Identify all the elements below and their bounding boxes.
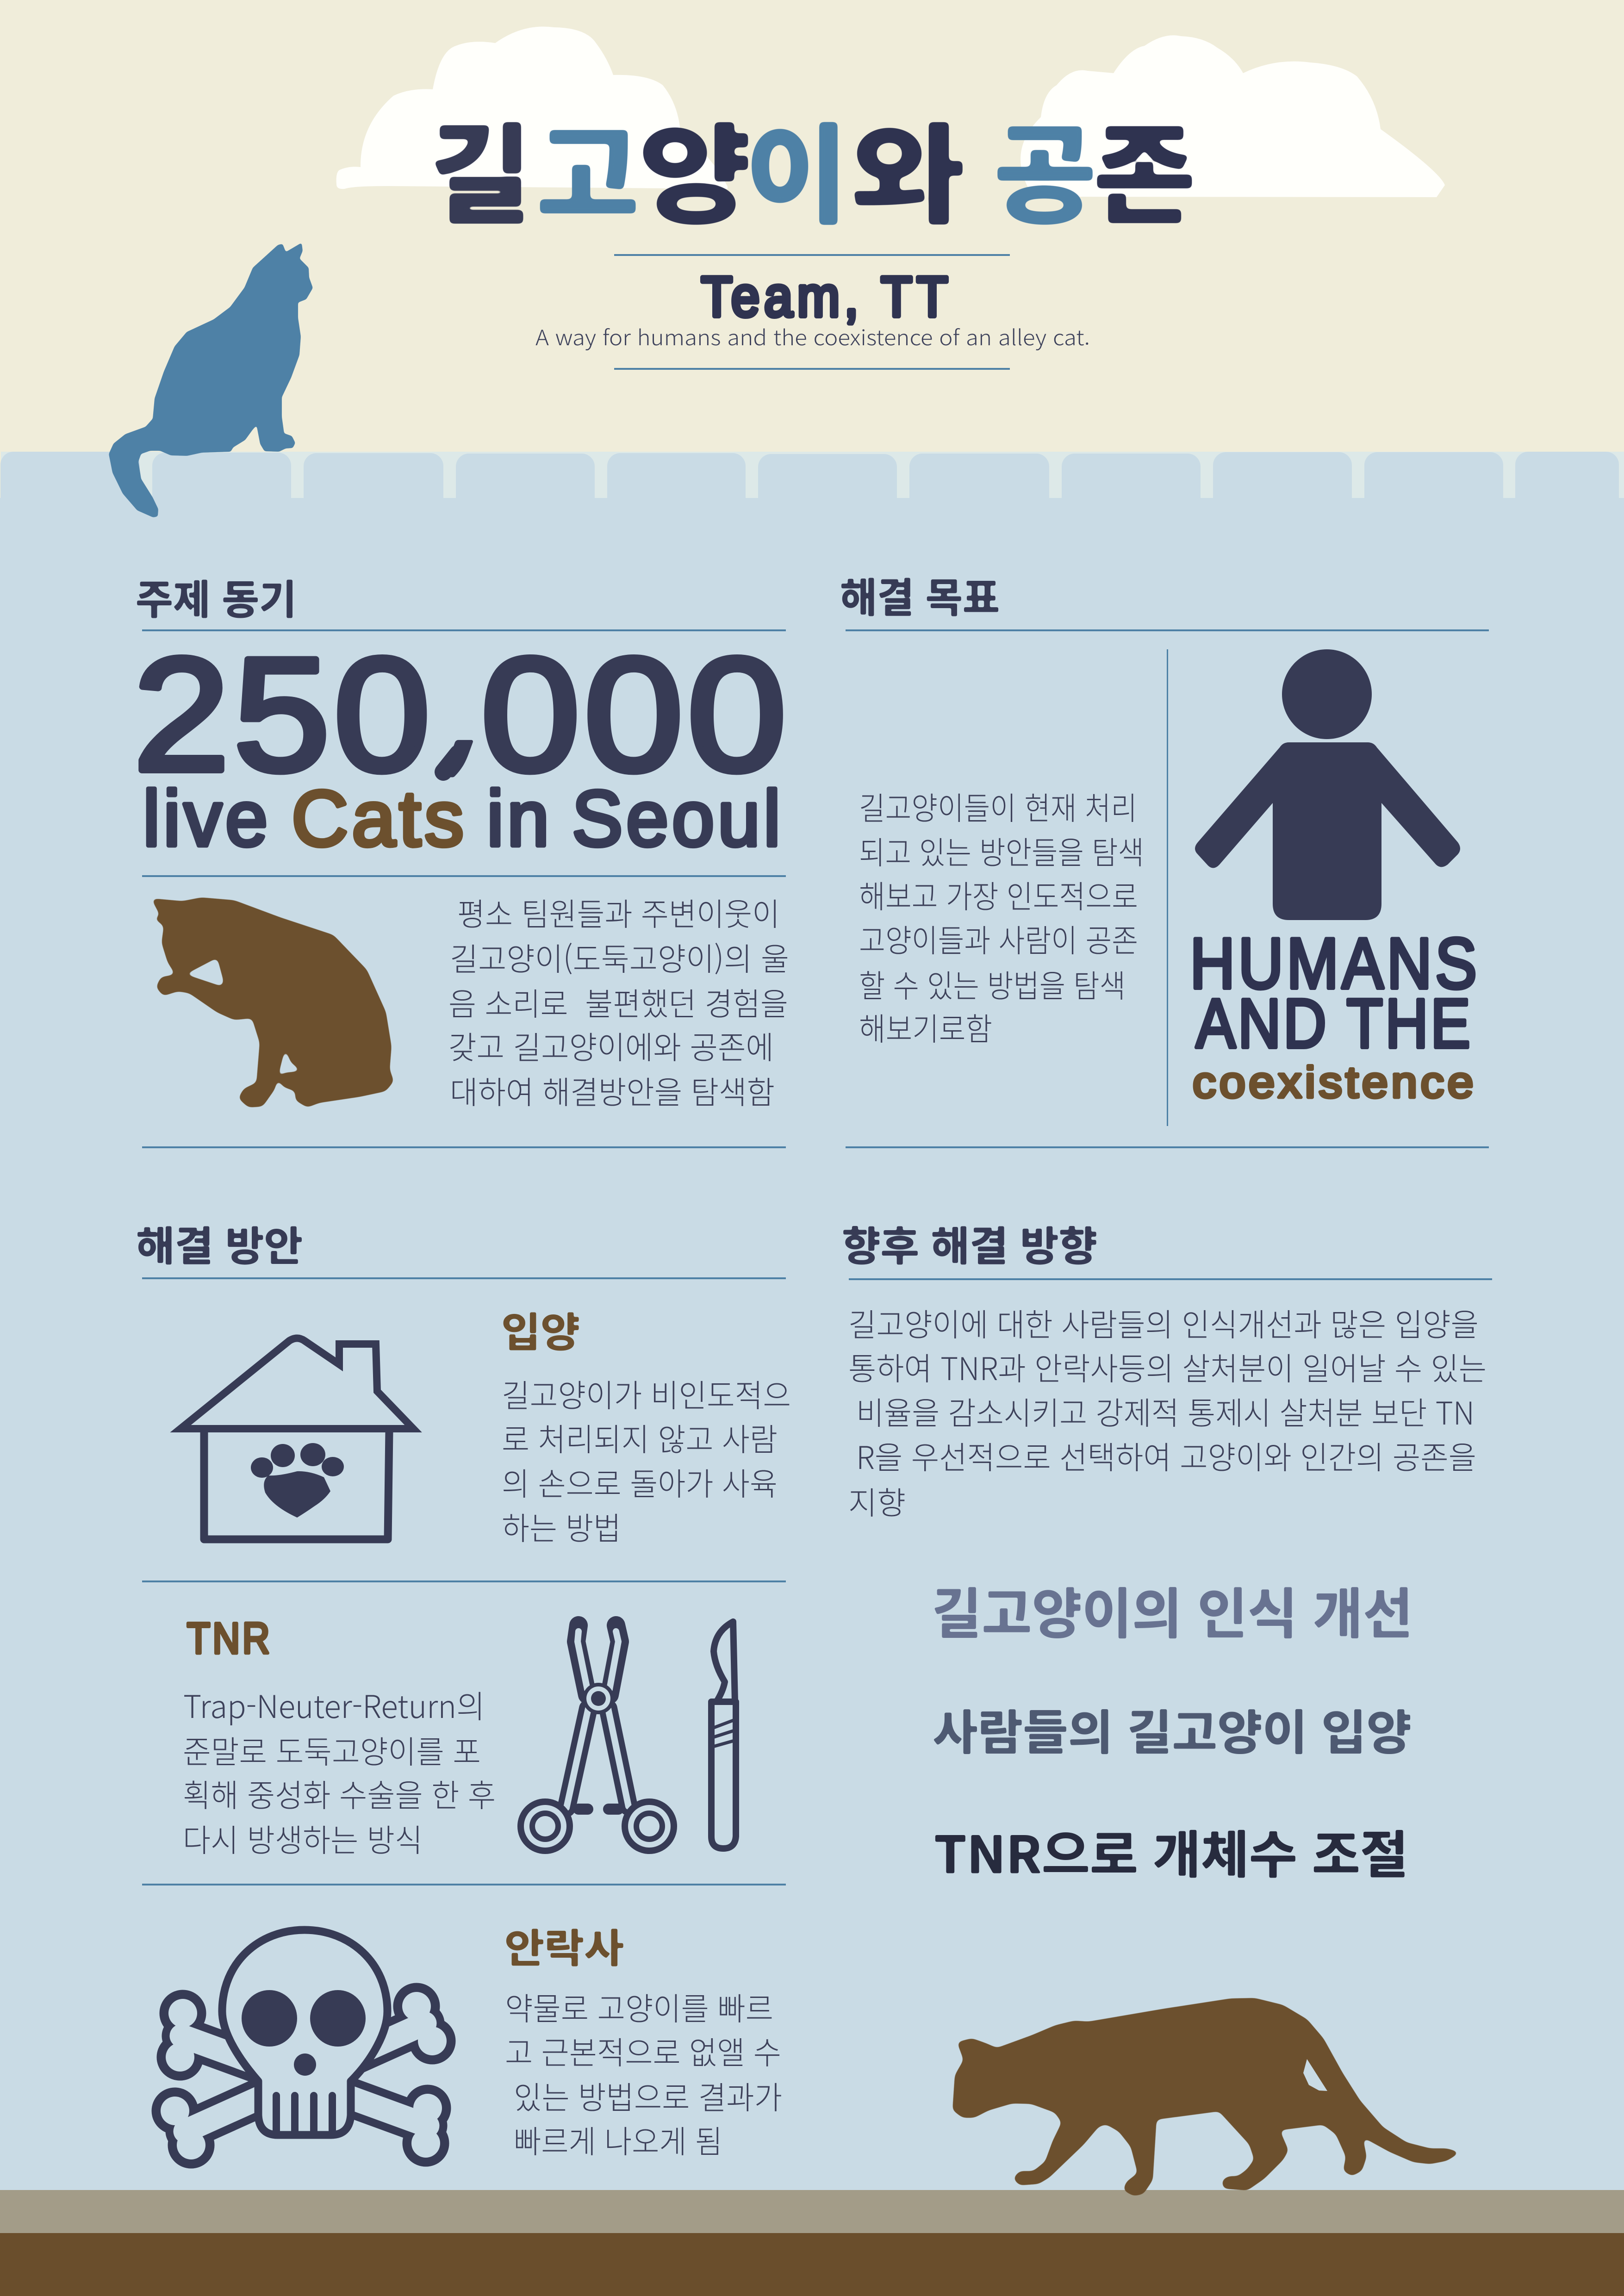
icon: house with paw (180, 1338, 413, 1539)
panel: 주제 동기 (133, 567, 790, 1148)
text: euthanasia (505, 1984, 782, 2162)
subheading: TNR: TNR (187, 1614, 272, 1662)
text: TNR description (183, 1681, 496, 1861)
text: motivation: 음 소리로 불편했던 경험을 (448, 979, 788, 1025)
subtitle: A way for humans and the coexistence of an alley cat. (535, 321, 1090, 352)
slogan: humans and the coexistence: HUMANS (1190, 923, 1480, 1003)
heading: 향후 해결 방향: 향후 해결 방향 (842, 1214, 1097, 1273)
text: adoption: 로 처리되지 않고 사람 (502, 1414, 778, 1460)
text: goal: 해보기로함 (859, 1004, 992, 1050)
icon: forceps (517, 1625, 677, 1854)
text: future direction: 길고양이에 대한 사람들의 인식개선과 많은 입양을 (848, 1300, 1479, 1345)
slogan: humans and the coexistence: AND THE (1196, 984, 1473, 1062)
big number: 000 (481, 624, 790, 804)
title: 길 (429, 87, 532, 246)
text: TNR description: 획해 중성화 수술을 한 후 (183, 1770, 496, 1816)
cloud right (1020, 35, 1445, 197)
team name: Team, TT (701, 265, 952, 328)
slogan: 사람들의 길고양이 입양: 사람들의 길고양이 입양 (933, 1694, 1412, 1763)
panel: 해결 목표 (840, 566, 1489, 1148)
text: adoption: 하는 방법 (502, 1503, 621, 1549)
panel: 해결 방안 (136, 1214, 791, 2168)
caption: live Cats in Seoul: live (143, 775, 271, 863)
panel: 향후 해결 방향 (842, 1214, 1492, 1888)
text: adoption: 길고양이가 비인도적으 (502, 1370, 791, 1416)
text: euthanasia: 빠르게 나오게 됨 (514, 2116, 722, 2162)
big number: 250 (133, 624, 434, 804)
cloud left (336, 26, 728, 189)
text: future direction: 비율을 감소시키고 강제적 통제시 살처분 보단 TN (856, 1388, 1475, 1434)
text: future direction: 통하여 TNR과 안락사등의 살처분이 일어날 수 있는 (848, 1344, 1487, 1389)
text: motivation (448, 889, 789, 1113)
text: goal: 할 수 있는 방법을 탐색 (859, 961, 1126, 1007)
sky background (0, 0, 1624, 463)
icon: brown walking cat (953, 1998, 1459, 2196)
text: adoption: 의 손으로 돌아가 사육 (502, 1459, 778, 1505)
text: motivation: 대하여 해결방안을 탐색함 (450, 1067, 775, 1113)
title: 존 (1093, 87, 1196, 246)
caption: live Cats in Seoul: Cats (292, 775, 467, 863)
title: 와 (851, 87, 965, 246)
text: motivation: 갖고 길고양이에와 공존에 (448, 1022, 774, 1068)
caption: live Cats in Seoul: Seoul (572, 775, 784, 863)
slogan: 길고양이의 인식 개선: 길고양이의 인식 개선 (932, 1570, 1413, 1649)
title: 고 (536, 87, 640, 246)
text: goal (859, 783, 1144, 1050)
title (429, 87, 1196, 246)
text: TNR description: 다시 방생하는 방식 (183, 1815, 423, 1861)
text: euthanasia: 고 근본적으로 없앨 수 (505, 2028, 781, 2073)
heading: 해결 목표: 해결 목표 (840, 566, 1000, 624)
title: 이 (745, 87, 849, 246)
text: goal: 고양이들과 사람이 공존 (859, 915, 1138, 961)
text: euthanasia: 약물로 고양이를 빠르 (505, 1984, 773, 2029)
slogan: humans and the coexistence (1190, 923, 1480, 1107)
title: 공 (993, 87, 1097, 246)
fence (0, 452, 1624, 2192)
text: motivation: 평소 팀원들과 주변이웃이 (457, 889, 780, 935)
heading: 주제 동기: 주제 동기 (136, 567, 297, 626)
heading: 해결 방안: 해결 방안 (136, 1214, 303, 1273)
text: future direction: 지향 (848, 1478, 906, 1524)
big number (133, 624, 790, 804)
text: motivation: 길고양이(도둑고양이)의 울 (450, 934, 789, 980)
icon: blue sitting cat (109, 243, 312, 517)
caption: live Cats in Seoul (143, 775, 784, 863)
icon: skull and crossbones (152, 1930, 455, 2168)
icon: scalpel (711, 1622, 736, 1848)
text: adoption (502, 1370, 791, 1549)
subheading: 입양: 입양 (501, 1300, 580, 1359)
big number: , (428, 632, 523, 787)
text: future direction: R을 우선적으로 선택하여 고양이와 인간의 공존을 (856, 1432, 1476, 1478)
text: euthanasia: 있는 방법으로 결과가 (514, 2072, 782, 2118)
text: goal: 해보고 가장 인도적으로 (859, 871, 1138, 917)
text: future direction (848, 1300, 1487, 1524)
ground (0, 2190, 1624, 2296)
icon: person (1195, 649, 1460, 920)
icon: brown cat licking paw (152, 898, 393, 1107)
text: TNR description: 준말로 도둑고양이를 포 (183, 1727, 481, 1773)
slogan: humans and the coexistence: coexistence (1193, 1058, 1477, 1107)
text: goal: 길고양이들이 현재 처리 (859, 783, 1137, 829)
slogan: TNR으로 개체수 조절: TNR으로 개체수 조절 (934, 1814, 1408, 1888)
caption: live Cats in Seoul: in (487, 775, 553, 863)
title: 양 (639, 87, 752, 246)
subheading: 안락사: 안락사 (504, 1916, 624, 1974)
text: goal: 되고 있는 방안들을 탐색 (859, 828, 1144, 873)
text: TNR description: Trap-Neuter-Return의 (183, 1681, 485, 1727)
